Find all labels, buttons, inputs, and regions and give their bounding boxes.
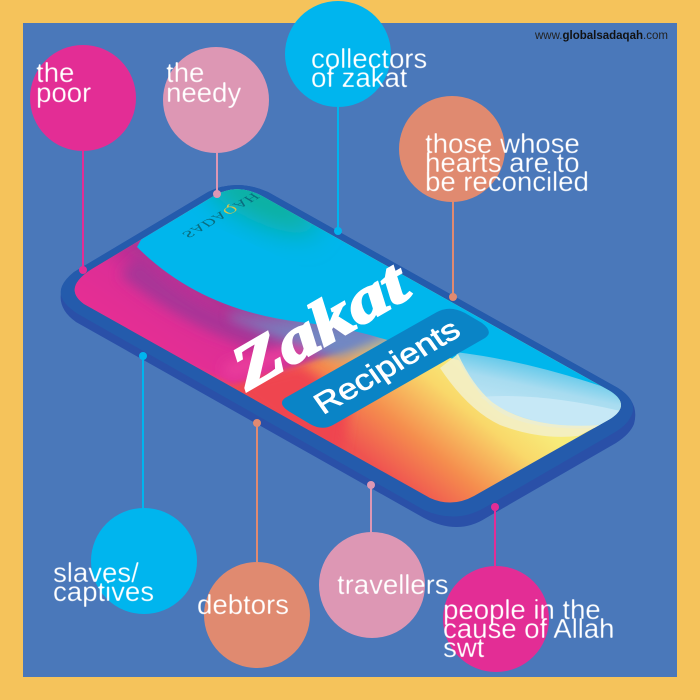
callout: people in the cause of Allah swt	[443, 503, 614, 672]
warm gradient	[74, 189, 621, 502]
callout: debtors: debtors	[197, 589, 289, 620]
callout: those whose hearts are to be reconciled: those whose	[425, 128, 580, 159]
blue glow	[230, 312, 430, 358]
callout: the poor: poor	[36, 77, 91, 108]
callout: people in the cause of Allah swt: cause of Allah	[443, 613, 614, 644]
callout: those whose hearts are to be reconciled: be reconciled	[425, 166, 589, 197]
light wave	[480, 396, 625, 428]
callout: those whose hearts are to be reconciled: hearts are to	[425, 147, 580, 178]
callout: slaves/captives	[53, 352, 197, 614]
phone body	[61, 185, 635, 527]
pale blue wave	[456, 352, 621, 428]
callout: collectors of zakat: of zakat	[311, 62, 408, 93]
phone illustration	[60, 185, 636, 527]
cyan area	[137, 189, 620, 400]
purple glow	[118, 258, 274, 348]
callout: the needy: the	[166, 57, 204, 88]
callout: people in the cause of Allah swt: swt	[443, 632, 485, 663]
callout: the poor: the	[36, 57, 74, 88]
callout: collectors of zakat	[285, 1, 427, 235]
callout: the poor	[30, 45, 136, 274]
callout: people in the cause of Allah swt: people in the	[443, 594, 601, 625]
subtitle: Recipients: Recipients	[308, 313, 466, 421]
red lower area	[228, 364, 354, 452]
callout: the needy	[163, 47, 269, 198]
callout: collectors of zakat: collectors	[311, 43, 427, 74]
pink lower glow	[225, 345, 315, 372]
callout: the needy: needy	[166, 77, 241, 108]
cream band	[440, 354, 600, 437]
phone front	[61, 185, 633, 517]
teal corner	[202, 189, 326, 248]
callout: slaves/captives: captives	[53, 576, 154, 607]
callout: slaves/captives: slaves/	[53, 557, 139, 588]
title: Zakat: Zakat	[218, 246, 421, 404]
recipients pill	[282, 309, 489, 428]
magenta area	[74, 226, 379, 388]
website url: www.globalsadaqah.com	[534, 30, 668, 42]
callout: debtors	[197, 419, 310, 668]
callout: those whose hearts are to be reconciled	[399, 96, 589, 301]
callout: travellers: travellers	[337, 569, 449, 600]
phone screen	[74, 189, 621, 502]
callout: travellers	[319, 481, 449, 638]
side buttons	[130, 347, 190, 381]
brand logo: SADAQAH	[178, 190, 262, 240]
